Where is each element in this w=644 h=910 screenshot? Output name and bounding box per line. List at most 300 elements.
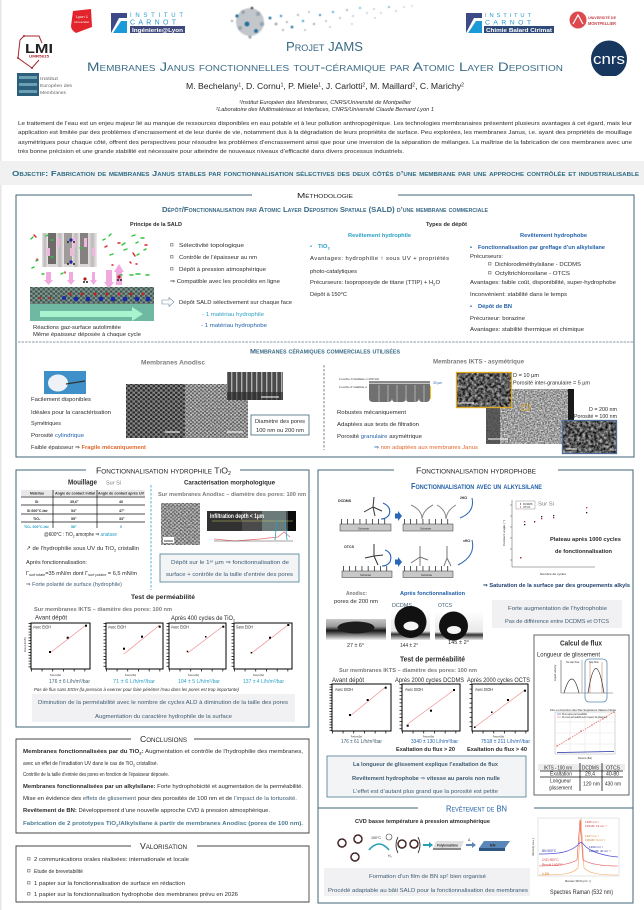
text: conclusions: Fabrication de 2 prototypes TiO [23, 821, 110, 827]
table: contact angles: TiO₂ 600°C /air [24, 525, 50, 529]
notes: wetting results: = 6,5 mN/m [106, 571, 137, 577]
scheme: OTCS grafting: xHCl [463, 539, 470, 543]
caption: SALD reactions: Même épaisseur déposée à chaque cycle [33, 332, 141, 338]
heading: permeability test: Sur membranes IKTS – diamètre des pores: 100 nm [34, 607, 172, 613]
labels: droplet samples: pores de 200 nm [334, 599, 378, 605]
heading: hydrophobic functionalisation: Fonctionnalisation hydrophobe [416, 466, 536, 476]
affiliations: Laboratoire des Multimatériaux et Interfaces, CNRS/Université Claude Bernard Lyon 1 [218, 107, 434, 113]
chart: flux vs pressure: Flux en Fonction des Pas Supérieurs Valeurs Notés [550, 708, 617, 712]
scheme: DCDMS grafting: Substrate [358, 526, 370, 530]
chart: flux vs pressure [550, 708, 617, 760]
chart: 400 cycles without EtOH: Pressure (Bar) [253, 673, 264, 677]
text: selective deposition: - 1 matériau hydrophobe [201, 323, 267, 329]
labels: alkylsilane charts: Avant dépôt [332, 677, 364, 684]
heading: methodology: Méthodologie [297, 191, 354, 200]
text: conclusions: avec un effet de l’irradiation UV dans le cas de TiO [23, 761, 153, 767]
callout: surface functionalisation: surface + contrôle de la taille d’entrée des pores [166, 572, 293, 578]
labels: droplet samples: Après fonctionnalisation [400, 591, 465, 597]
logo: network of dots [231, 5, 413, 39]
values: contact angles: 27 ± 6° [347, 643, 364, 649]
chart: contact angle vs cycles: Sur Si [538, 502, 554, 508]
heading: flux calculation: Longueur de glissement [537, 652, 600, 658]
logo: Institut Carnot Chimie Balard Cirimat: CARNOT [485, 20, 531, 26]
micrograph: top view [161, 503, 200, 545]
panel: conclusions [16, 734, 309, 833]
panel: flux calculation [534, 635, 629, 795]
table: contact angles: 40 [119, 500, 123, 504]
text: conclusions: Contrôle de la taille d’entrée des pores en fonction de l’épaisseur déposée. [23, 772, 169, 778]
values: alkylsilane permeability: Exaltation du flux > 40 [467, 747, 527, 753]
text: selective deposition: - 1 matériau hydrophile [202, 312, 264, 318]
text: conclusions: : [142, 749, 144, 755]
column: hydrophobic coating: Octyltrichlorosilane - OTCS [495, 271, 570, 277]
chart: 400 cycles EtOH B [168, 623, 226, 677]
table: contact angles: Matériau [30, 492, 44, 496]
chart: Raman spectra: 1365 cm⁻¹ [585, 820, 599, 824]
values: contact angles: 144 ± 2° [400, 643, 418, 649]
chart: 2000 cycles OTCS: Pressure (Bar) [493, 734, 504, 738]
table: slip length: 29,4 [585, 772, 596, 778]
diagram: velocity profiles: No slip flow [566, 660, 579, 664]
title: Membranes Janus fonctionnelles tout-céramique par Atomic Layer Deposition [87, 60, 563, 74]
chart: 400 cycles EtOH A [104, 623, 163, 677]
diagram: velocity profiles: Slip flow [589, 660, 599, 664]
notes: wetting results: anatase [101, 532, 117, 538]
affiliations: 2 [215, 106, 218, 110]
heading: flux calculation: Calcul de flux [560, 640, 602, 648]
callout: BN film: bien organisé [448, 874, 486, 880]
logo: LMI [17, 35, 53, 69]
logo: Institut Carnot Ingénierie@Lyon: CARNOT [130, 20, 177, 26]
labels: TiO2 charts: Avant dépôt [35, 614, 67, 622]
chart: Raman spectra: CVD 900°C [542, 858, 559, 862]
objective banner [0, 161, 644, 185]
logo: LMI: UMR5615 [29, 54, 49, 58]
notes: plateau and saturation [483, 537, 630, 589]
diagram: IKTS cross-section [339, 377, 442, 402]
notes: plateau and saturation: ⇒ Saturation de la surface par des groupements alkyls [483, 583, 630, 589]
table: contact angles: 47° [119, 509, 125, 513]
column: hydrophilic coating: 2 [328, 246, 331, 250]
authors: 1 [281, 82, 284, 88]
label: principle of SALD: Principe de la SALD [130, 222, 182, 228]
chart: Raman spectra [531, 818, 619, 883]
heading: permeability test: Sur membranes IKTS – diamètre des pores: 100 nm [339, 668, 477, 674]
arrow: OTCS grafting [395, 557, 402, 567]
notes: wetting results: cristallin [116, 546, 139, 552]
text: conclusions: Membranes fonctionnalisées par un alkylsilane: Forte hydrophobicité et augmentation de la perméabilité. [23, 784, 303, 790]
logo: Université de Montpellier: MONTPELLIER [588, 21, 617, 26]
heading: permeability test [339, 656, 477, 674]
micrographs: IKTS [456, 372, 617, 454]
subheading: commercial membranes: Membranes céramiques commerciales utilisées [250, 348, 401, 356]
label: morphological characterisation [158, 480, 306, 498]
table: slip length: DCDMS [582, 766, 599, 772]
chart: Raman spectra: FWHM: 19 cm⁻¹ [585, 824, 607, 828]
table: contact angles: 35,6° [70, 500, 79, 504]
list: valorisation: Etude de brevetabilité [34, 869, 83, 875]
table: contact angles: 55° [71, 517, 77, 521]
text: conclusions: cristallisé. [135, 761, 158, 767]
diagram: SALD principle [30, 233, 154, 321]
list: SALD advantages [170, 243, 280, 285]
scheme: BN synthesis [338, 834, 510, 861]
column: hydrophobic coating [470, 233, 616, 333]
authors: 2 [461, 82, 464, 88]
chart: 400 cycles EtOH B: Pressure (Bar) [188, 673, 199, 677]
values: permeability TiO2: 71 ± 6 L/h/m²/bar [113, 679, 155, 685]
chart: 2000 cycles OTCS [470, 684, 528, 738]
logo: Institut Carnot Ingénierie@Lyon: INSTITUT [130, 13, 183, 19]
table: slip length: Exaltation [550, 772, 572, 778]
callout: hydrophobicity: Forte augmentation de l’hydrophobie [508, 606, 607, 612]
notes: wetting results: @600°C : TiO [44, 532, 80, 538]
text: conclusions: Membranes fonctionnalisées par du TiO [23, 749, 140, 755]
callout: surface functionalisation [160, 554, 299, 582]
objective banner: Objectif: Fabrication de membranes Janus stables par fonctionnalisation sélectives des deux côtés d’une membrane par une approche contrôlée et industrialisable [12, 169, 640, 178]
column: hydrophobic coating: Fonctionnalisation par greffage d’un alkylsilane [478, 245, 606, 251]
logo: Université de Lyon: Université [74, 20, 89, 24]
notes: wetting results: ⇒ Forte polarité de surface (hydrophile) [26, 582, 122, 588]
callout: surface functionalisation: µm ⇒ fonctionnalisation de [213, 560, 289, 566]
table: contact angles: 54° [71, 509, 77, 513]
chart: Raman spectra: h-BN [542, 872, 550, 876]
table: slip length: Longueur [550, 778, 571, 784]
labels: alkylsilane charts: Après 2000 cycles DCDMS [395, 677, 464, 684]
table: slip length: 120 nm [583, 782, 600, 788]
affiliations: 1 [239, 100, 241, 104]
diagram: velocity profiles: Liquid velocity [553, 664, 557, 681]
affiliations [215, 100, 434, 113]
chart: Raman spectra: Raman Shift (cm⁻¹) [565, 879, 591, 883]
label: wetting [68, 480, 121, 486]
list: Anodisc properties: Faible épaisseur ⇒ Fragile mécaniquement [31, 445, 146, 451]
values: contact angles [347, 640, 469, 649]
authors: 1 [318, 82, 321, 88]
labels: TiO2 charts: 2 [233, 618, 236, 622]
heading: conclusions: Conclusions [140, 734, 187, 744]
photo: droplet on Anodisc [326, 619, 386, 640]
panel: hydrophilic functionalisation [16, 466, 309, 727]
list: valorisation: 1 papier sur la fonctionnalisation de surface en rédaction [34, 881, 185, 887]
labels: droplet samples: DCDMS [392, 603, 412, 609]
column: hydrophilic coating: 2 [433, 282, 436, 286]
callout: BN film [324, 868, 530, 896]
diagram: IKTS cross-section: Couche d’alumine α [339, 385, 367, 389]
text: conclusions: Revêtement de BN: Développement d’une nouvelle approche CVD à pression atmosphérique. [23, 808, 270, 814]
authors: , M. Maillard [365, 81, 413, 91]
logo: Université de Montpellier: UNIVERSITÉ DE [588, 15, 616, 20]
scheme: OTCS grafting: Substrate [360, 573, 372, 577]
panel: valorisation [16, 841, 309, 902]
authors: 1 [238, 82, 241, 88]
logo: Institut Carnot Ingénierie@Lyon: Ingénierie@Lyon [132, 28, 183, 34]
notes: wetting results: surf polaire [88, 573, 106, 577]
chart: 400 cycles EtOH B: Avec EtOH [171, 624, 189, 630]
text: conclusions: Augmentation et contrôle de l’hydrophilie des membranes, [145, 749, 294, 755]
heading: valorisation: Valorisation [140, 841, 187, 851]
introduction text: Le traitement de l’eau est un enjeu majeur lié au manque de ressources disponibles en eau potable et à leur pollution anthropogénique. Les technologies membranaires présentent plusieurs avantages à cet égard, mais leur [18, 121, 632, 127]
logo: Institut Carnot Chimie Balard Cirimat: INSTITUT [485, 13, 531, 19]
scheme: BN synthesis: 150°C [371, 835, 381, 840]
photo: droplet on DCDMS [391, 606, 430, 640]
subheading: SALD deposition: Dépôt/Fonctionnalisation par Atomic Layer Deposition Spatiale (SALD) d’une membrane commerciale [162, 205, 489, 214]
callout: BN film: Formation d’un film de BN sp [369, 874, 444, 880]
callout: slip length: La longueur de glissement explique l’exaltation de flux [353, 762, 499, 768]
heading: hydrophilic functionalisation: Fonctionnalisation hydrophile TiO [96, 466, 220, 476]
photo: Anodisc membrane [44, 371, 86, 394]
logo: CNRS [590, 40, 630, 79]
logo: Institut Carnot Ingénierie@Lyon [111, 13, 185, 34]
chart: contact angle vs cycles: OTCS [523, 505, 530, 509]
callout: hydrophobicity [492, 600, 622, 628]
labels: droplet samples: Anodisc: [346, 591, 367, 597]
values: alkylsilane permeability: Exaltation du flux > 20 [396, 747, 455, 753]
introduction text: très bonne précision et une grande stabilité est nécessaire pour atteindre de nouveaux niveaux d’efficacité dans divers processus industriels. [18, 149, 404, 155]
scheme: DCDMS grafting: DCDMS [338, 499, 352, 503]
text: selective deposition [179, 300, 292, 329]
logo: LMI: LMI [25, 41, 53, 56]
panel: hydrophobic functionalisation [318, 466, 633, 903]
table: slip length: 40-80 [606, 772, 619, 778]
values: alkylsilane permeability: 7518 ± 211 L/h/m²/bar [481, 739, 530, 745]
labels: droplet samples: OTCS [438, 603, 452, 609]
scheme: DCDMS grafting [338, 496, 472, 531]
caption: SALD reactions [33, 325, 141, 338]
scheme: OTCS grafting [342, 539, 473, 578]
chart: 2000 cycles OTCS: Avec EtOH [475, 687, 493, 693]
introduction text [18, 121, 632, 155]
heading: permeability test: Test de perméabilité [131, 594, 195, 601]
logo: CNRS: cnrs [593, 51, 625, 68]
chart: Raman spectra: 1369 cm⁻¹ [589, 845, 603, 849]
scheme: OTCS grafting: OTCS [344, 545, 355, 549]
notes: wetting results [26, 532, 139, 588]
label: IKTS membranes: Membranes IKTS - asymétrique [433, 358, 524, 366]
heading: BN coating: Revêtement de BN [446, 804, 507, 814]
callout: permeability conclusions: Diminution de la perméabilité avec le nombre de cycles ALD à diminution de la taille des pores [38, 700, 288, 706]
column: hydrophobic coating: Avantages: faible coût, disponibilité, super-hydrophobe [470, 280, 616, 286]
notes: wetting results: 2 [73, 534, 75, 538]
micrograph: infiltration depth [207, 511, 296, 541]
micrographs: Anodisc [126, 372, 283, 438]
scheme: BN synthesis: Δ [468, 838, 471, 842]
chart: 2000 cycles DCDMS [400, 684, 460, 738]
labels: TiO2 charts [35, 614, 236, 622]
column: hydrophobic coating: Précurseurs: [470, 254, 503, 260]
column: hydrophilic coating: photo-catalytiques [310, 269, 357, 275]
table: slip length: 430 nm [605, 782, 621, 788]
list: valorisation: 1 papier sur la fonctionnalisation hydrophobe des membranes prévu en 2026 [34, 892, 238, 898]
label: Anodisc membranes: Membranes Anodisc [141, 360, 206, 366]
column: hydrophobic coating: Dépôt de BN [478, 304, 512, 310]
labels: IKTS layer properties: D = 200 nm [589, 407, 617, 413]
affiliations: Institut Européen des Membranes, CNRS/Université de Montpellier [241, 100, 411, 106]
diagram: IKTS cross-section: Couche d’alumine α 200 nm [339, 377, 379, 381]
chart: before deposition [23, 623, 90, 677]
callout: slip length: L’effet est d’autant plus grand que la porosité est petite [353, 789, 498, 795]
labels: alkylsilane charts: Après 2000 cycles OCTS [467, 677, 530, 684]
table: slip length: IKTS - 100 nm [544, 766, 572, 772]
logo: Institut Européen des Membranes [17, 73, 73, 96]
labels: alkylsilane charts [332, 677, 530, 684]
subheading: alkylsilane: Fonctionnalisation avec un alkylsilane [411, 482, 542, 491]
table: contact angles: Angle de contact initial [55, 492, 95, 496]
authors: 2 [412, 82, 415, 88]
notes: plateau and saturation: Plateau après 1000 cycles [550, 537, 621, 543]
notes: wetting results: surf totale [29, 573, 45, 577]
list: Anodisc properties: Porosité cylindrique [31, 433, 84, 439]
table: contact angles: TiO₂ [33, 517, 41, 521]
diagram: velocity profiles [553, 659, 613, 702]
column: hydrophobic coating: • [470, 304, 472, 310]
chart: Raman spectra: BN 900°C [542, 849, 557, 853]
text: conclusions: /Alkylsilane à partir de membranes Anodisc (pores de 100 nm). [118, 821, 303, 827]
chart: contact angle vs cycles: Nombre de cycles [540, 572, 567, 576]
chart: 2000 cycles DCDMS: Pressure (Bar) [423, 734, 434, 738]
callout: permeability conclusions [32, 694, 295, 722]
introduction text: application est limitée par des problèmes d’encrassement et de leur durée de vie, notamment dus à la dégradation de leurs propriétés de surface. Peu explorées, les membranes Janus, i.e. ayant des propriétés de mouillage [18, 130, 632, 136]
chart: before deposition: Avec EtOH [335, 687, 353, 693]
labels: IKTS layer properties: Porosité inter-granulaire = 5 µm [513, 380, 590, 386]
callout: surface functionalisation: er [210, 558, 214, 564]
labels: droplet samples [334, 591, 465, 609]
list: IKTS properties: Robustes mécaniquement [337, 410, 406, 416]
scheme: DCDMS grafting: 2HCl [460, 496, 467, 500]
table: contact angles: 58° [71, 525, 77, 529]
list: IKTS properties: Adaptées aux tests de filtration [337, 422, 419, 428]
callout: slip length: Revêtement hydrophobe ⇒ vitesse au parois non nulle [352, 776, 501, 782]
notes: wetting results: 2 [114, 548, 117, 552]
notes: wetting results: Après fonctionnalisation: [26, 560, 87, 566]
logo: Institut Carnot Chimie Balard Cirimat: Chimie Balard Cirimat [486, 28, 552, 34]
text: conclusions: Mise en évidence des effets de glissement pour des porosités de 100 nm et de l’impact de la tortuosité. [23, 796, 297, 802]
chart: contact angle vs cycles: DCDMS [523, 502, 533, 506]
table: slip length [538, 763, 625, 792]
label: morphological characterisation: Caractérisation morphologique [184, 480, 275, 486]
values: contact angles: 145 ± 2° [448, 640, 469, 646]
list: Anodisc properties: Facilement disponibles [31, 397, 91, 403]
authors: , P. Miele [283, 81, 319, 91]
chart: Raman spectra: FWHM: 40 cm⁻¹ [589, 849, 611, 853]
arrow: DCDMS grafting [395, 511, 402, 521]
labels: IKTS layer properties: Porosité = 100 nm [574, 414, 617, 420]
column: hydrophilic coating: Revêtement hydrophile [348, 233, 412, 239]
list: Anodisc properties: Symétriques [31, 421, 61, 427]
table: contact angles: 33° [119, 517, 125, 521]
list: Anodisc properties: Idéales pour la caractérisation [31, 410, 111, 416]
note: no flow without EtOH: Pas de flux sans EtOH (la pression à exercer pour faire pénétrer l’eau dans les pores est trop importante) [34, 687, 239, 692]
notes: wetting results: =35 mN/m dont Γ [45, 571, 89, 577]
text: conclusions: 2 [139, 750, 142, 756]
values: alkylsilane permeability: 176 ± 61 L/h/m²/bar [341, 739, 382, 745]
callout: permeability conclusions: Augmentation du caractère hydrophile de la surface [95, 714, 232, 720]
chart: before deposition: Pressure (Bar) [50, 673, 61, 677]
list: IKTS properties [337, 410, 478, 451]
heading: permeability test: Test de perméabilité [400, 656, 465, 664]
column: hydrophilic coating [310, 233, 449, 298]
chart: 2000 cycles DCDMS: Avec EtOH [405, 687, 423, 693]
label: deposit types: Types de dépôt [426, 222, 467, 228]
text: conclusions: 2 [133, 762, 136, 768]
arrow: selective deposition [162, 298, 174, 306]
chart: contact angle vs cycles [502, 500, 595, 576]
list: Anodisc properties [31, 397, 146, 451]
list: SALD advantages: ⇒ Compatible avec les procédés en ligne [170, 279, 280, 285]
table: contact angles: 0 [120, 525, 122, 529]
authors: , J. Carlotti [321, 81, 363, 91]
chart: before deposition: Pressure (Bar) [351, 734, 362, 738]
column: hydrophobic coating: Précurseur: borazine [470, 316, 525, 322]
text: conclusions: 2 [116, 822, 119, 828]
column: hydrophobic coating: Avantages: stabilité thermique et chimique [470, 327, 584, 333]
values: permeability TiO2: 176 ± 6 L/h/m²/bar [49, 679, 90, 685]
notes: wetting results: amorphe ⇒ [74, 532, 101, 538]
values: alkylsilane permeability: 3340 ± 130 L/h/m²/bar [411, 739, 458, 745]
chart: Raman spectra: Recuit 1400°C [542, 863, 563, 867]
micrograph: infiltration depth: Infiltration depth < 1µm [210, 513, 264, 520]
heading: hydrophilic functionalisation: 2 [228, 471, 231, 477]
logo: Institut Européen des Membranes: Européen des [40, 83, 73, 88]
text: selective deposition: Dépôt SALD sélectivement sur chaque face [179, 300, 292, 306]
heading: permeability test [34, 594, 195, 613]
caption: SALD reactions: Réactions gaz-surface autolimitée [33, 325, 121, 331]
column: hydrophilic coating: • [310, 244, 312, 250]
table: contact angles: Angle de contact après UV [98, 492, 145, 496]
list: valorisation: 2 communications orales réalisées: internationale et locale [34, 857, 189, 863]
list: IKTS properties: Porosité granulaire asymétrique [337, 434, 422, 440]
callout: hydrophobicity: Pas de différence entre DCDMS et OTCS [505, 619, 609, 625]
chart: before deposition: Flux (L/m²/h) [23, 637, 27, 652]
callout: pore diameter: Diamètre des pores [255, 419, 305, 425]
values: alkylsilane permeability [341, 739, 530, 753]
column: hydrophobic coating: Inconvénient: stabilité dans le temps [470, 292, 567, 298]
title: Projet JAMS [286, 39, 363, 54]
diagram: IKTS cross-section: 30 µm [433, 381, 442, 385]
label: wetting: Mouillage [68, 480, 97, 486]
column: hydrophilic coating: TiO [318, 244, 328, 250]
label: CVD: CVD basse température à pression atmosphérique [355, 819, 491, 825]
values: permeability TiO2: 137 ± 4 L/h/m²/bar [243, 679, 284, 685]
chart: before deposition: Avec EtOH [33, 624, 51, 630]
scheme: DCDMS grafting: Substrate [420, 526, 432, 530]
values: permeability TiO2 [49, 679, 284, 685]
table: contact angles: Si 600°C /air [27, 509, 48, 513]
list: IKTS properties: ⇒ non adaptées aux membranes Janus [374, 445, 478, 451]
table: slip length: glissement [549, 786, 572, 792]
table: slip length: OTCS [606, 766, 620, 772]
notes: plateau and saturation: de fonctionnalisation [555, 549, 612, 555]
chart: 400 cycles without EtOH [232, 623, 292, 677]
values: permeability TiO2: 104 ± 5 L/h/m²/bar [178, 679, 220, 685]
logo: Université de Lyon [71, 9, 92, 33]
label: wetting: Sur Si [106, 480, 121, 486]
chart: contact angle vs cycles: Contact angle (°) [502, 520, 506, 546]
column: hydrophobic coating: Dichlorodiméthylsilane - DCDMS [495, 262, 581, 268]
chart: flux vs pressure: Pressure (Bar) [578, 756, 592, 760]
list: SALD advantages: Sélectivité topologique [179, 243, 244, 249]
callout: pore diameter [251, 415, 309, 435]
photo: droplet on OTCS [435, 611, 483, 640]
scheme: BN synthesis: Polyborazilène [437, 844, 458, 848]
chart: 400 cycles EtOH A: Avec EtOH [108, 624, 126, 630]
authors [186, 81, 464, 91]
labels: TiO2 charts: Après 400 cycles de TiO [171, 615, 240, 622]
chart: Raman spectra: 1367 cm⁻¹ [585, 834, 599, 838]
list: SALD advantages: Contrôle de l’épaisseur au nm [179, 255, 257, 261]
scheme: BN synthesis: BN [490, 844, 496, 848]
list: SALD advantages: Dépôt à pression atmosphérique [179, 267, 266, 273]
